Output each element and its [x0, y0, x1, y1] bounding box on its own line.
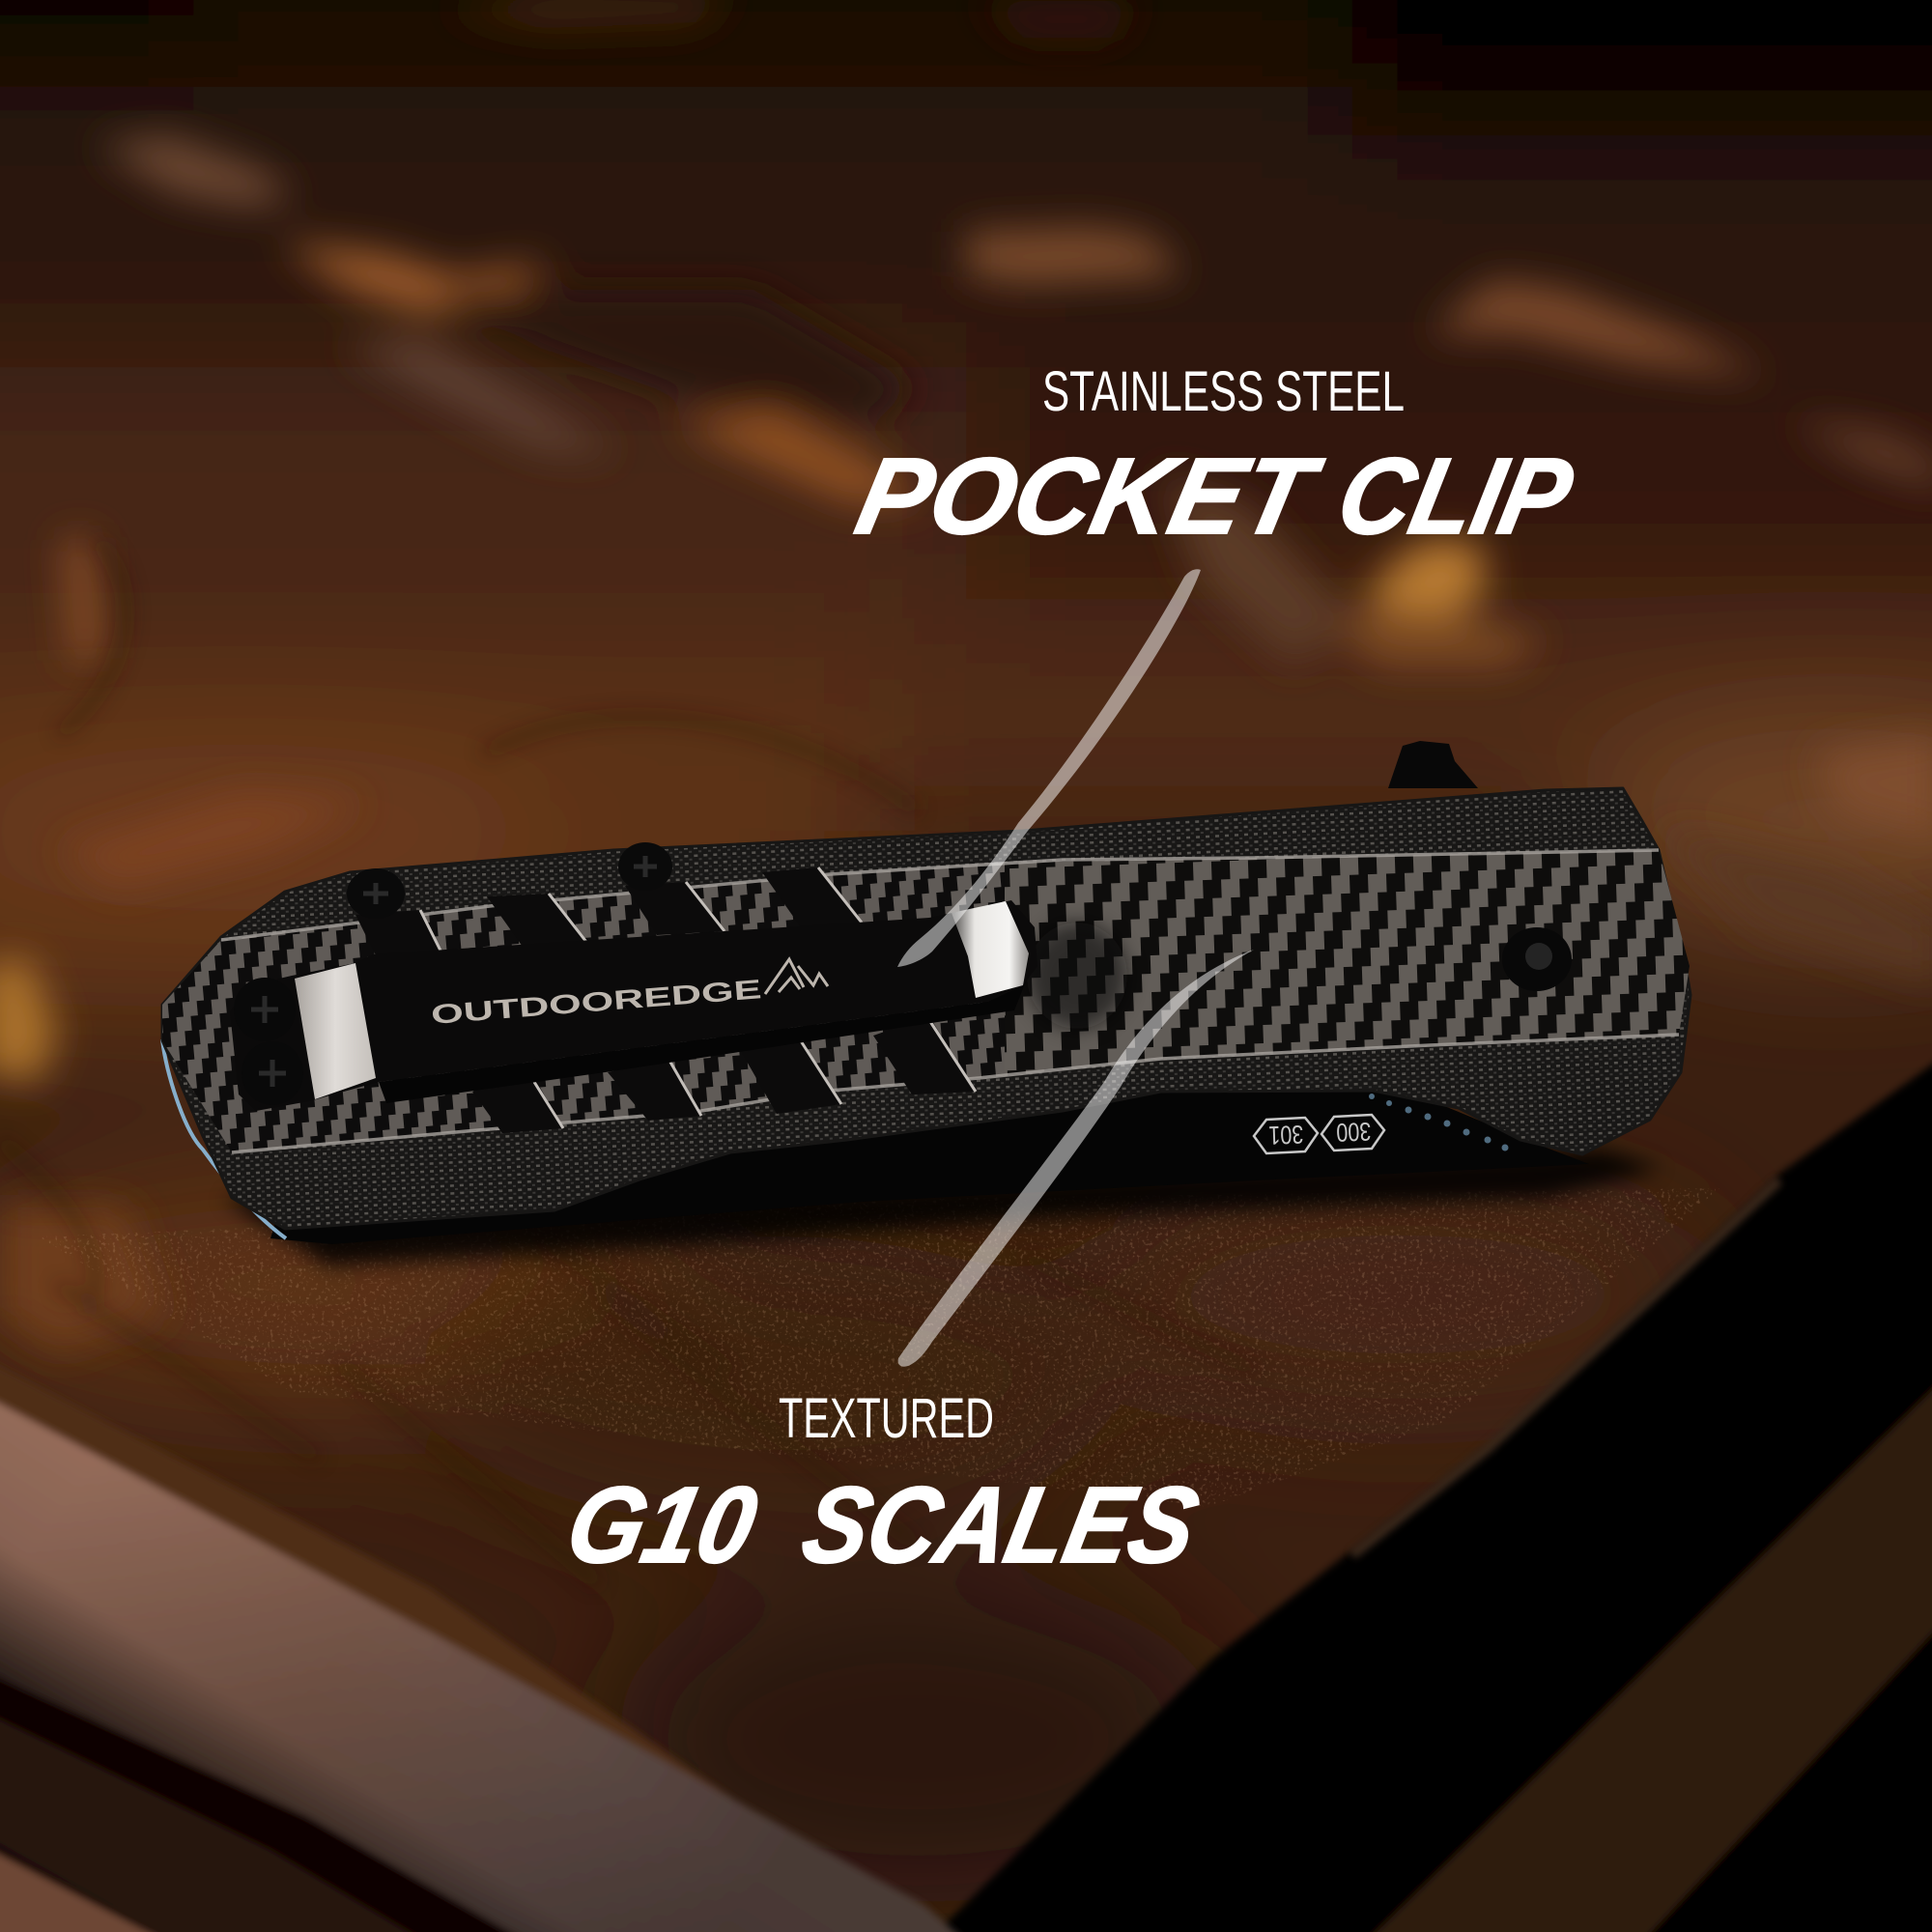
steel code hexagon 301 [1254, 1118, 1318, 1153]
surface speckle [43, 1188, 1719, 1507]
G10 handle scale [162, 788, 1690, 1229]
heading: pocket clip: POCKET [847, 435, 1331, 556]
label: textured: TEXTURED [779, 1387, 994, 1450]
table wood grain [0, 541, 1256, 1584]
callout line: pocket clip [897, 569, 1201, 967]
wedge highlight edge [1352, 1180, 1779, 1555]
heading: pocket clip: CLIP [1328, 435, 1582, 556]
steel code hexagon 301: 301 [1268, 1120, 1304, 1150]
heading: G10 scales [557, 1463, 1208, 1585]
heading: G10 scales: G10 [557, 1463, 767, 1585]
knife shadow [222, 1150, 1662, 1265]
steel code hexagon 300: 300 [1336, 1117, 1372, 1147]
clip brand text: OUTDOOREDGE [430, 974, 762, 1030]
slot edge highlights [420, 867, 976, 1128]
carbon fibre inlay, left section [162, 862, 1024, 1152]
label: stainless steel: STAINLESS STEEL [1042, 360, 1405, 423]
shadow under clip [379, 981, 1026, 1103]
clip mountain logo [765, 959, 828, 994]
inlay edge highlights [221, 850, 1679, 1152]
clip body [230, 900, 1037, 1111]
clip screw lower [242, 1041, 303, 1105]
pocket clip [230, 900, 1037, 1111]
steel code hexagon 300 [1321, 1115, 1384, 1151]
dark smudge beside clip [1027, 923, 1127, 1029]
bottom-left wood edge [0, 1362, 966, 1932]
blade underneath handle [270, 1080, 1589, 1244]
clip right polished bend [952, 901, 1029, 998]
clip screw upper [234, 978, 296, 1041]
blade spine glint [162, 1039, 286, 1238]
thumb stud [1388, 741, 1478, 788]
heading: G10 scales: SCALES [793, 1463, 1208, 1585]
top screw left [347, 868, 405, 919]
blade serrations [1369, 1094, 1509, 1151]
carbon fibre inlay, right section [1005, 850, 1690, 1076]
clip left polished bend [295, 963, 376, 1099]
bottom-right dark table joint [927, 1058, 1932, 1932]
top screw right [618, 842, 672, 891]
pivot screw [1502, 927, 1572, 991]
liner slots [355, 867, 976, 1133]
callout line: G10 scales [898, 950, 1254, 1367]
heading: pocket clip [847, 435, 1582, 556]
folding knife [162, 741, 1690, 1244]
